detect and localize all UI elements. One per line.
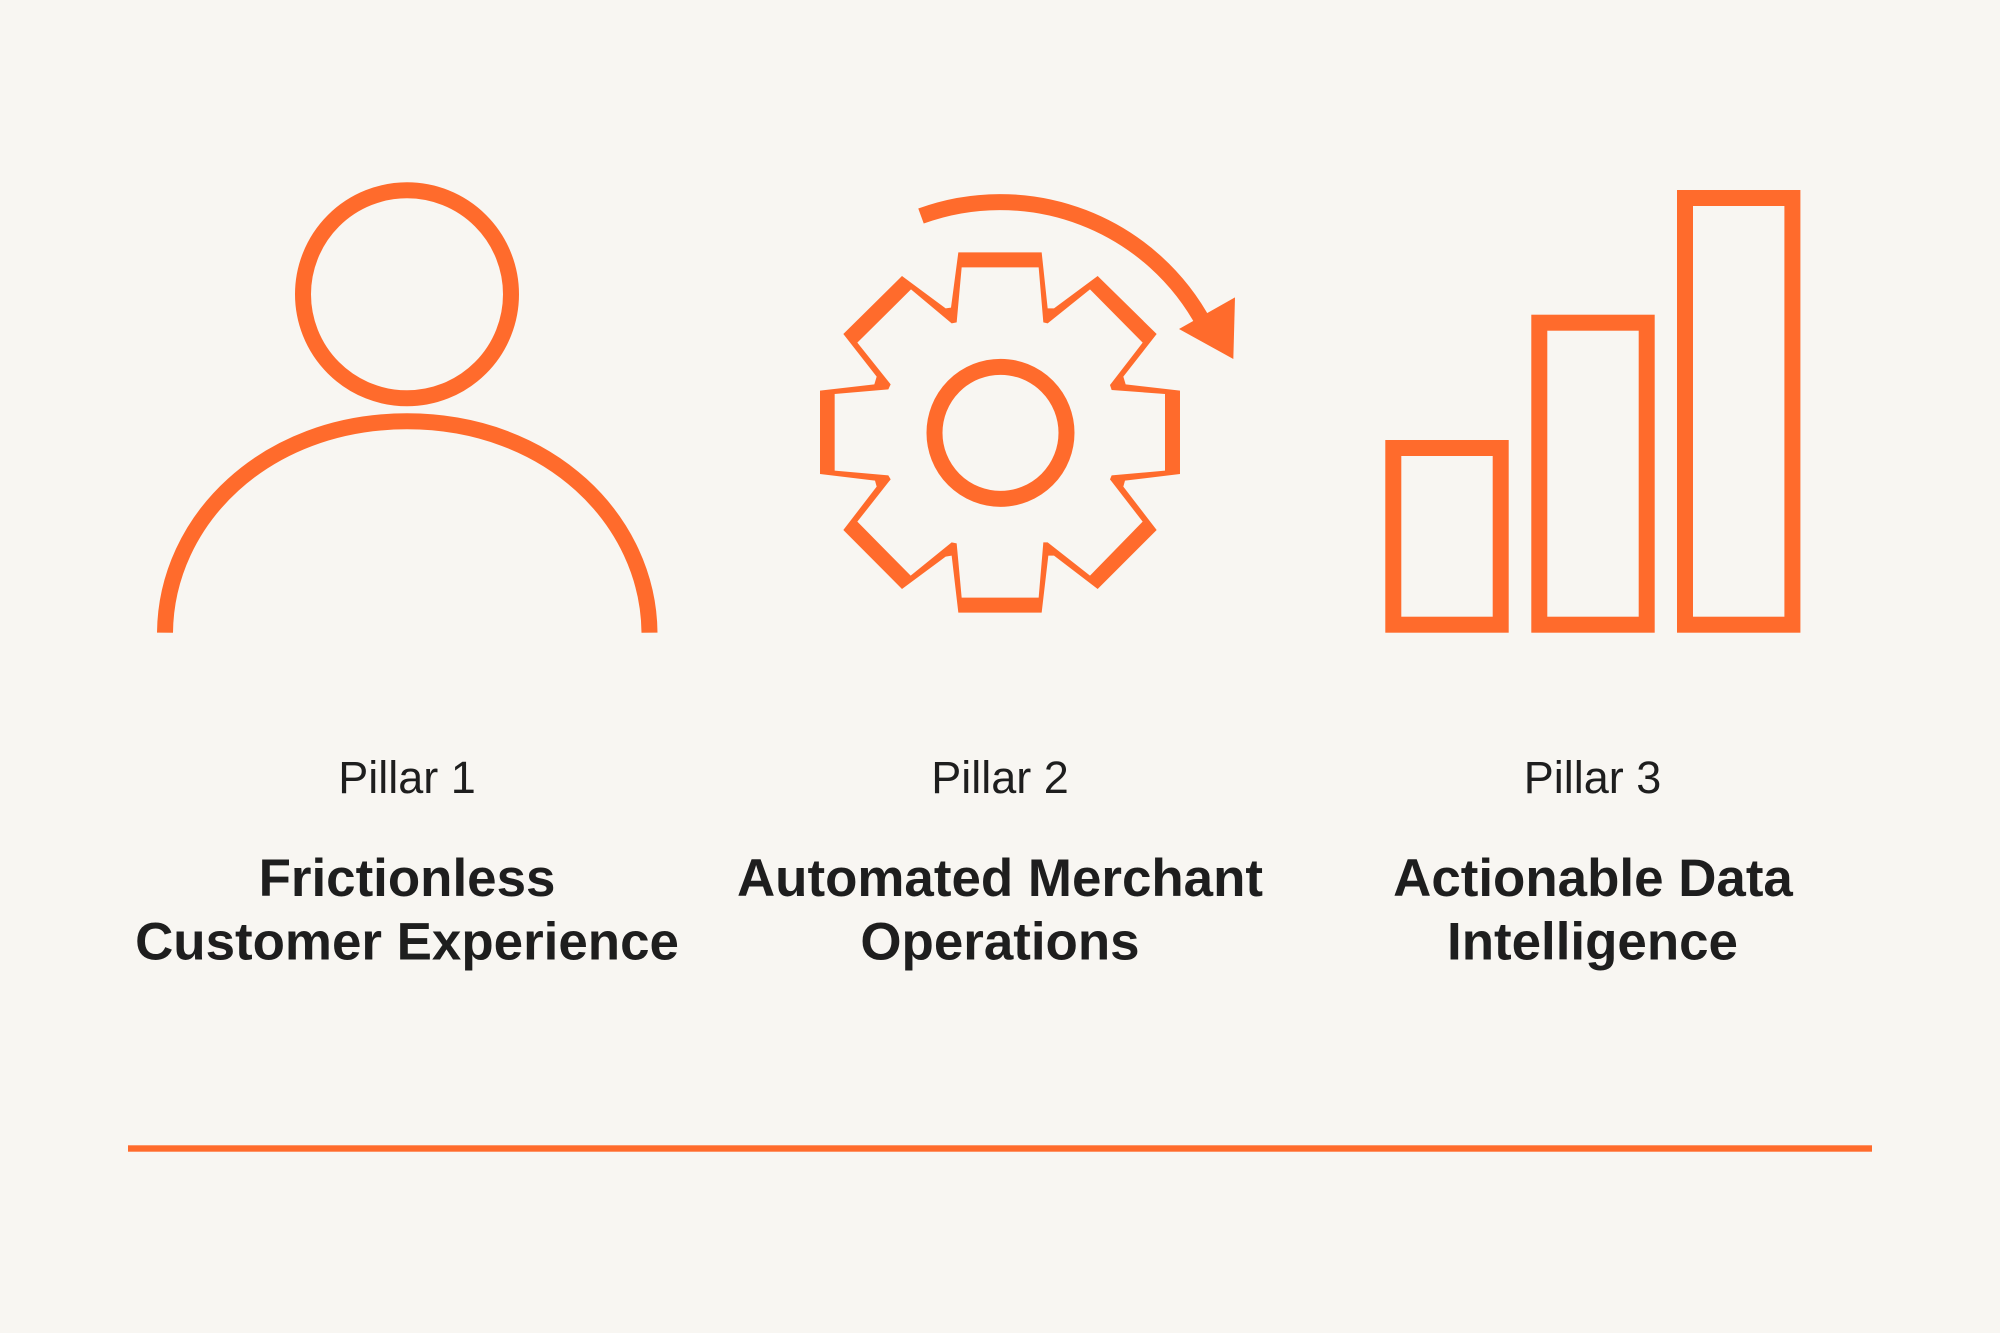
person head <box>303 190 511 398</box>
person shoulders <box>165 421 650 633</box>
bar medium <box>1539 323 1647 625</box>
pillar 1 title: Customer Experience <box>135 912 679 972</box>
pillar 3 title: Intelligence <box>1447 912 1738 972</box>
pillar 1 title: Frictionless <box>259 849 555 908</box>
gear hub <box>934 367 1066 499</box>
divider line <box>128 1145 1872 1152</box>
bar small <box>1393 448 1501 625</box>
pillar 2 label: Pillar 2 <box>931 752 1069 803</box>
pillar 2 title: Automated Merchant <box>737 849 1263 908</box>
icon: gear with rotation arrow <box>820 202 1235 613</box>
pillar 1 label: Pillar 1 <box>338 752 476 803</box>
pillar 2 title: Operations <box>860 912 1140 972</box>
bar tall <box>1685 198 1792 625</box>
gear outline <box>820 252 1180 613</box>
pillar 3 title: Actionable Data <box>1393 849 1793 908</box>
rotation arc <box>921 202 1205 325</box>
icon: bar chart <box>1393 198 1792 625</box>
icon: person <box>165 190 650 633</box>
pillar 3 label: Pillar 3 <box>1524 752 1661 803</box>
arrowhead <box>1179 297 1235 359</box>
